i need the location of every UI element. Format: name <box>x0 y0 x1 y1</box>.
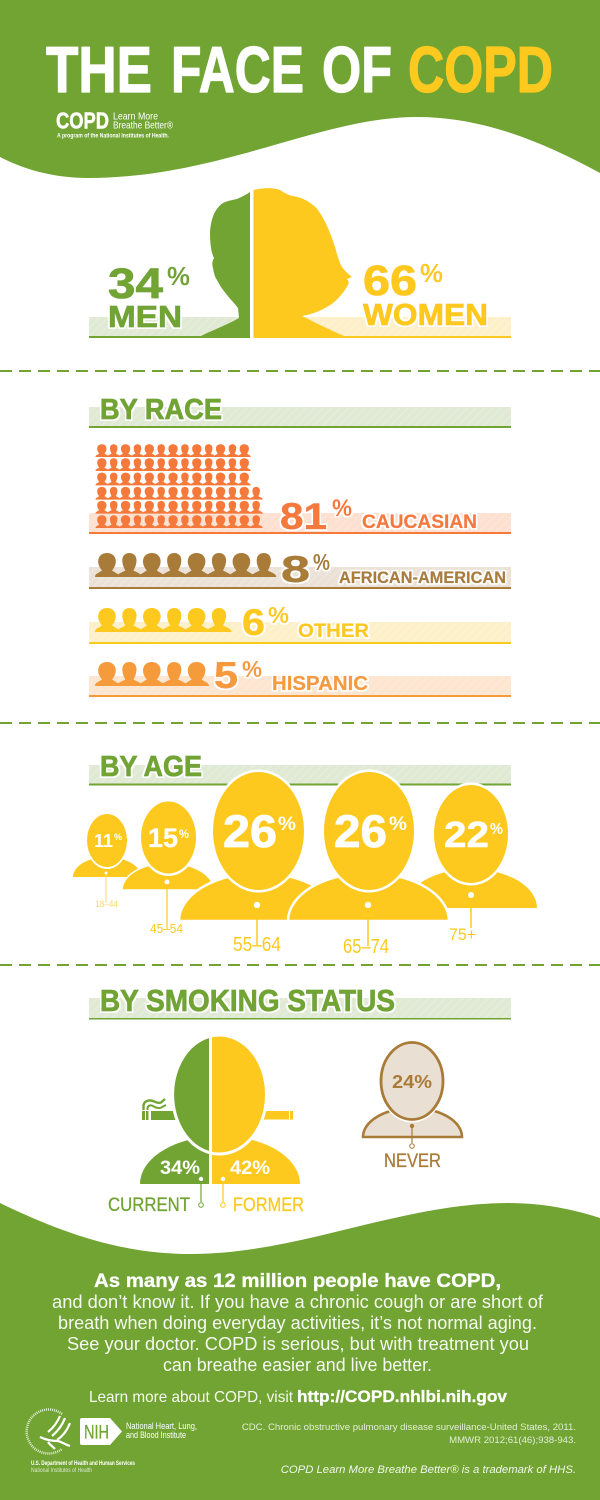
person: 65-74: % <box>389 814 407 835</box>
caucasian bar <box>89 513 511 534</box>
women bar <box>300 317 511 338</box>
person: 18-44: 11 <box>94 831 113 851</box>
logo: COPD Learn More Breathe Better: A program of the National Institutes of Health. <box>57 134 169 140</box>
call-to-action text: breath when doing everyday activities, it’s not normal aging. <box>58 1312 537 1333</box>
women stat <box>363 257 488 332</box>
stat: other: 6 <box>242 602 265 643</box>
person: never smoked: 24% <box>392 1072 432 1092</box>
person: 65-74: 65–74 <box>343 936 389 958</box>
heading: by race: BY RACE <box>100 394 222 426</box>
icon: NIH badge <box>80 1418 122 1445</box>
logo: COPD Learn More Breathe Better: COPD <box>56 108 109 134</box>
men stat <box>108 260 190 334</box>
stat: caucasian: 81 <box>280 496 327 537</box>
men stat: 34 <box>108 260 163 308</box>
person: 75+: 75+ <box>449 925 476 944</box>
person: never smoked <box>363 1040 462 1172</box>
callout: former: FORMER <box>233 1195 304 1216</box>
logo: COPD Learn More Breathe Better: Learn More <box>113 110 158 122</box>
citation: CDC. Chronic obstructive pulmonary disease surveillance-United States, 2011. <box>242 1422 576 1433</box>
person: current and former smokers: 34% <box>160 1158 200 1179</box>
header banner <box>0 0 600 178</box>
other bar <box>89 622 511 644</box>
heading: by smoking status: BY SMOKING STATUS <box>100 983 395 1018</box>
website line <box>89 1387 508 1406</box>
citation <box>242 1422 576 1446</box>
person: 45-54: % <box>179 827 189 841</box>
panel: gender <box>89 188 511 338</box>
women stat: % <box>420 258 443 288</box>
person: never smoked: NEVER <box>384 1151 441 1172</box>
title: OF <box>322 33 392 106</box>
african-american bar <box>89 567 511 589</box>
person: 18-44: % <box>114 832 122 842</box>
person: 65-74: 26 <box>334 806 387 857</box>
call-to-action text: can breathe easier and live better. <box>163 1354 432 1375</box>
heading bar: by race <box>89 407 511 428</box>
stat: hispanic: 5 <box>214 655 238 696</box>
stat: african-american: % <box>313 549 330 575</box>
men stat: % <box>167 261 190 291</box>
person: current and former smokers: 42% <box>230 1158 270 1179</box>
stat: hispanic <box>214 655 368 696</box>
title: THE <box>46 33 152 106</box>
men bar <box>89 317 249 338</box>
website line: Learn more about COPD, visit <box>89 1389 294 1406</box>
person: 18-44: 18–44 <box>95 899 118 909</box>
stat: caucasian <box>280 495 477 537</box>
icon: lit cigarette <box>142 1099 177 1120</box>
male half head silhouette <box>197 192 250 338</box>
person: 55-64: 26 <box>223 806 277 857</box>
female half head silhouette <box>254 188 352 338</box>
department text <box>31 1460 135 1474</box>
citation: MMWR 2012;61(46);938-943. <box>449 1435 576 1446</box>
NIH institute name: and Blood Institute <box>126 1430 186 1441</box>
heading: by age: BY AGE <box>100 751 202 783</box>
title: FACE <box>171 33 304 106</box>
person: 75+ <box>405 782 537 944</box>
people row: hispanic <box>95 662 209 686</box>
icon: HHS seal <box>27 1410 70 1454</box>
icon: stubbed cigarette <box>262 1111 293 1120</box>
call-to-action text: and don’t know it. If you have a chronic cough or are short of <box>52 1291 544 1312</box>
stat: other <box>242 602 369 643</box>
call-to-action text: See your doctor. COPD is serious, but with treatment you <box>67 1333 529 1354</box>
stat: african-american: AFRICAN-AMERICAN <box>339 569 506 587</box>
stat: african-american: 8 <box>281 549 310 590</box>
trademark note: COPD Learn More Breathe Better® is a trademark of HHS. <box>281 1464 576 1476</box>
title <box>46 33 553 106</box>
panel: by smoking status <box>89 983 511 1216</box>
person: 55-64: 55–64 <box>233 934 281 956</box>
stat: caucasian: CAUCASIAN <box>362 512 477 533</box>
stat: hispanic: % <box>242 656 262 682</box>
call-to-action text <box>52 1271 544 1375</box>
department text: U.S. Department of Health and Human Services <box>31 1460 135 1467</box>
footer panel <box>0 1203 600 1500</box>
person: 18-44 <box>73 812 141 909</box>
person: 75+: 22 <box>444 814 489 855</box>
person: 75+: % <box>490 821 503 838</box>
person: 65-74 <box>288 770 449 958</box>
logo: COPD Learn More Breathe Better: Breathe Better® <box>113 120 173 132</box>
stat: hispanic: HISPANIC <box>272 673 368 695</box>
callout: current <box>108 1177 203 1216</box>
icon: NIH badge: NIH <box>84 1422 109 1444</box>
person: 45-54: 45–54 <box>150 921 183 936</box>
NIH institute name: National Heart, Lung, <box>126 1421 197 1432</box>
person: 55-64 <box>179 770 340 956</box>
callout: current: CURRENT <box>108 1195 190 1216</box>
men stat: MEN <box>108 299 182 334</box>
callout: former <box>221 1177 304 1216</box>
logo: COPD Learn More Breathe Better <box>56 108 173 140</box>
people row: african-american <box>95 553 276 577</box>
women stat: WOMEN <box>363 297 488 332</box>
stat: other: OTHER <box>298 621 369 642</box>
hispanic bar <box>89 676 511 697</box>
department text: National Institutes of Health <box>31 1467 92 1474</box>
website line: http://COPD.nhlbi.nih.gov <box>297 1387 508 1406</box>
title: COPD <box>408 33 553 106</box>
heading bar: smoking <box>89 998 511 1020</box>
NIH institute name <box>126 1421 197 1441</box>
person: 55-64: % <box>278 814 296 835</box>
person: current and former smokers <box>140 1034 300 1184</box>
call-to-action text: As many as 12 million people have COPD, <box>94 1271 501 1292</box>
people row: other <box>95 608 231 632</box>
women stat: 66 <box>363 257 417 305</box>
stat: caucasian: % <box>332 495 352 522</box>
person: 45-54: 15 <box>148 823 178 853</box>
panel: by race <box>89 394 511 697</box>
stat: african-american <box>281 549 506 590</box>
panel: by age <box>73 751 537 958</box>
person: 45-54 <box>122 799 214 936</box>
people grid: caucasian <box>95 444 263 528</box>
stat: other: % <box>268 602 289 628</box>
heading bar: by age <box>89 765 511 786</box>
